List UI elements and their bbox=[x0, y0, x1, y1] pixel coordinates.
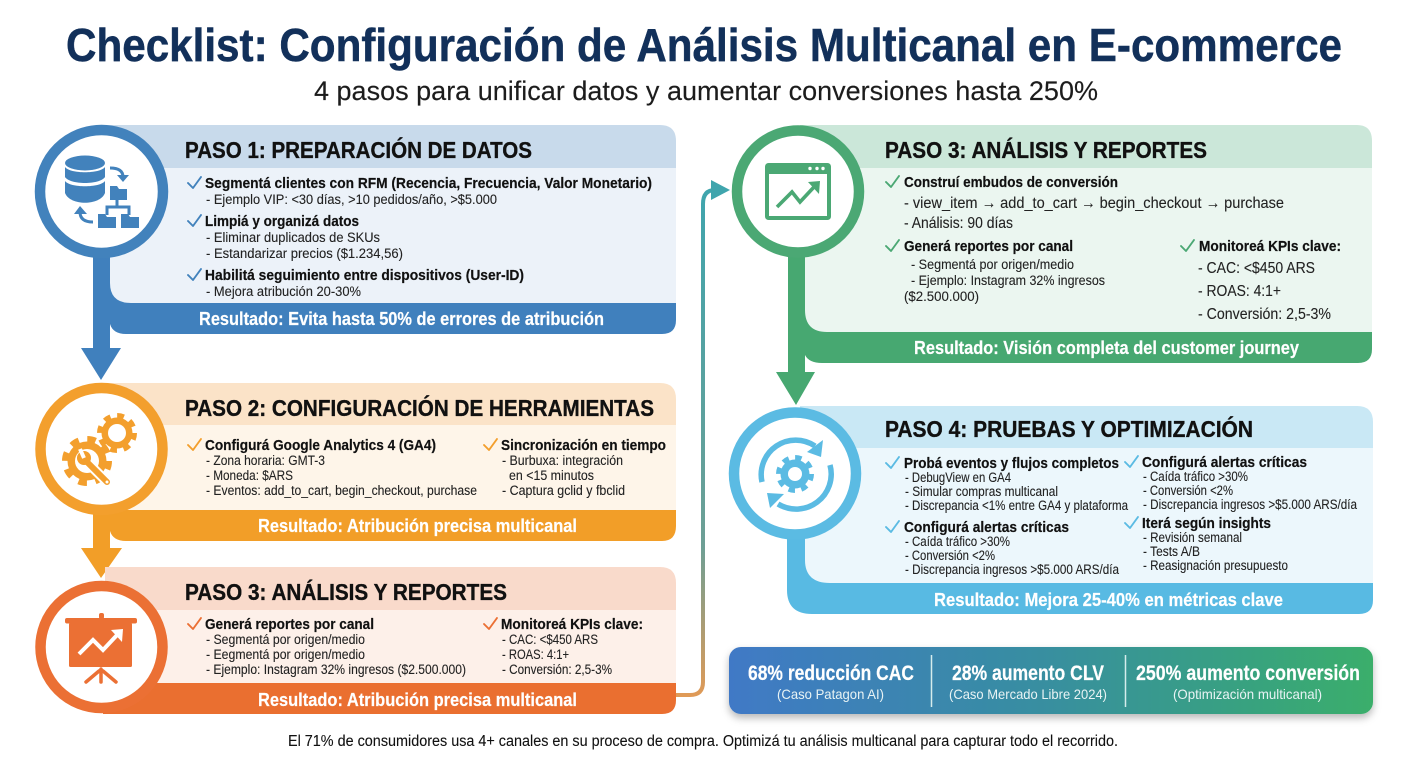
checklist: paso 1: - Estandarizar precios ($1.234,56) bbox=[206, 246, 403, 261]
panel: paso 4 bbox=[734, 406, 1373, 614]
checklist: paso 3 izquierda left: Generá reportes por canal bbox=[205, 616, 374, 633]
icon: presentation board bbox=[40, 586, 162, 708]
checklist: KPIs: - Conversión: 2,5-3% bbox=[1198, 306, 1331, 323]
stat: 68%: 68% reducción CAC bbox=[748, 662, 914, 685]
checklist: embudos: - Análisis: 90 días bbox=[904, 215, 1013, 232]
checklist: KPIs: - CAC: <$450 ARS bbox=[1198, 260, 1315, 277]
subtitle: 4 pasos para unificar datos y aumentar conversiones hasta 250% bbox=[314, 76, 1098, 106]
checklist: reportes por canal bbox=[886, 238, 1105, 304]
checklist: iterá: - Reasignación presupuesto bbox=[1143, 558, 1288, 573]
result: paso 3 derecha: Resultado: Visión completa del customer journey bbox=[914, 338, 1299, 358]
checklist: alertas derecha: - Conversión <2% bbox=[1143, 483, 1233, 498]
icon: browser window with chart bbox=[737, 130, 859, 252]
checklist: probá eventos: - Simular compras multicanal bbox=[905, 484, 1058, 499]
checklist: reportes por canal: Generá reportes por canal bbox=[904, 238, 1073, 255]
checklist: paso 2 right: en <15 minutos bbox=[509, 468, 594, 483]
checklist: paso 1: - Ejemplo VIP: <30 días, >10 pedidos/año, >$5.000 bbox=[206, 192, 497, 207]
checklist: reportes por canal: ($2.500.000) bbox=[904, 289, 979, 304]
checklist: paso 2 left bbox=[188, 437, 477, 498]
checklist: probá eventos: - DebugView en GA4 bbox=[905, 470, 1011, 485]
checklist: paso 3 izquierda right: Monitoreá KPIs clave: bbox=[501, 616, 643, 633]
stat: 28%: 28% aumento CLV bbox=[952, 662, 1104, 685]
panel: paso 1 bbox=[40, 125, 676, 380]
result bar: paso 3 izquierda bbox=[103, 683, 676, 714]
connector and result bar: paso 1 bbox=[81, 250, 676, 380]
checklist: iterá: - Revisión semanal bbox=[1143, 530, 1242, 545]
checklist: KPIs: - ROAS: 4:1+ bbox=[1198, 283, 1281, 300]
panel: resultados clave bbox=[729, 647, 1373, 714]
checklist: paso 3 izquierda left: - Ejemplo: Instagram 32% ingresos ($2.500.000) bbox=[206, 662, 466, 677]
checklist: iterá bbox=[1125, 515, 1288, 573]
checklist: alertas izquierda: - Caída tráfico >30% bbox=[905, 534, 1010, 549]
checklist: alertas izquierda: - Discrepancia ingresos >$5.000 ARS/día bbox=[905, 562, 1119, 577]
checklist: alertas izquierda bbox=[886, 519, 1119, 577]
checklist: embudos: Construí embudos de conversión bbox=[904, 174, 1118, 191]
stat: 28% bbox=[949, 662, 1107, 702]
result: paso 1: Resultado: Evita hasta 50% de errores de atribución bbox=[199, 309, 604, 329]
checklist: probá eventos bbox=[886, 455, 1128, 513]
checklist: alertas izquierda: - Conversión <2% bbox=[905, 548, 995, 563]
icon: refresh arrows with gear bbox=[734, 412, 856, 534]
stat: 28%: (Caso Mercado Libre 2024) bbox=[949, 686, 1107, 702]
panel: paso 3 derecha bbox=[737, 125, 1372, 405]
result: paso 4: Resultado: Mejora 25-40% en métricas clave bbox=[934, 590, 1283, 610]
connector and result bar: paso 4 bbox=[787, 530, 1373, 614]
stat: 250%: 250% aumento conversión bbox=[1136, 662, 1360, 685]
icon: database and folders bbox=[40, 130, 163, 253]
checklist: paso 3 izquierda right: - ROAS: 4:1+ bbox=[502, 647, 569, 662]
heading: paso 3 izquierda: PASO 3: ANÁLISIS Y REPORTES bbox=[185, 578, 507, 605]
checklist: alertas derecha: Configurá alertas críticas bbox=[1142, 454, 1307, 471]
checklist: paso 1: - Mejora atribución 20-30% bbox=[206, 284, 361, 299]
checklist: paso 1 bbox=[188, 175, 652, 299]
checklist: paso 3 izquierda right bbox=[484, 616, 643, 677]
checklist: paso 2 right bbox=[484, 437, 666, 498]
checklist: paso 2 left: - Zona horaria: GMT-3 bbox=[206, 453, 325, 468]
checklist: alertas derecha bbox=[1125, 454, 1357, 512]
checklist: paso 2 left: - Eventos: add_to_cart, begin_checkout, purchase bbox=[206, 483, 477, 498]
heading: paso 4: PASO 4: PRUEBAS Y OPTIMIZACIÓN bbox=[885, 415, 1253, 442]
checklist: paso 2 right: Sincronización en tiempo bbox=[501, 437, 666, 454]
checklist: embudos: - view_item → add_to_cart → begin_checkout → purchase bbox=[904, 195, 1284, 212]
checklist: probá eventos: Probá eventos y flujos completos bbox=[904, 455, 1119, 472]
stat: 250%: (Optimización multicanal) bbox=[1173, 686, 1322, 702]
checklist: alertas derecha: - Caída tráfico >30% bbox=[1143, 469, 1248, 484]
checklist: KPIs bbox=[1181, 238, 1341, 323]
checklist: paso 1: Habilitá seguimiento entre dispositivos (User-ID) bbox=[205, 267, 524, 284]
result: paso 3 izquierda: Resultado: Atribución precisa multicanal bbox=[258, 690, 577, 710]
checklist: KPIs: Monitoreá KPIs clave: bbox=[1199, 238, 1341, 255]
checklist: paso 3 izquierda left: - Segmentá por origen/medio bbox=[206, 632, 365, 647]
checklist: alertas derecha: - Discrepancia ingresos >$5.000 ARS/día bbox=[1143, 497, 1357, 512]
checklist: paso 3 izquierda right: - Conversión: 2,5-3% bbox=[502, 662, 612, 677]
checklist: iterá: - Tests A/B bbox=[1143, 544, 1200, 559]
stat: 68% bbox=[748, 662, 914, 702]
arrow: connector from left column to right column bbox=[676, 180, 730, 695]
checklist: paso 2 left: Configurá Google Analytics 4 (GA4) bbox=[205, 437, 436, 454]
icon: gears and wrench bbox=[40, 388, 162, 510]
checklist: paso 2 left: - Moneda: $ARS bbox=[206, 468, 293, 483]
checklist: paso 1: Segmentá clientes con RFM (Recencia, Frecuencia, Valor Monetario) bbox=[205, 175, 652, 192]
checklist: alertas izquierda: Configurá alertas críticas bbox=[904, 519, 1069, 536]
heading: paso 2: PASO 2: CONFIGURACIÓN DE HERRAMIENTAS bbox=[185, 394, 654, 421]
heading: paso 3 derecha: PASO 3: ANÁLISIS Y REPORTES bbox=[885, 136, 1207, 163]
checklist: probá eventos: - Discrepancia <1% entre GA4 y plataforma bbox=[905, 498, 1128, 513]
stat: 68%: (Caso Patagon AI) bbox=[777, 686, 884, 702]
panel: paso 3 izquierda bbox=[40, 567, 676, 714]
footer note: El 71% de consumidores usa 4+ canales en su proceso de compra. Optimizá tu análisis multicanal para capturar todo el recorrido. bbox=[288, 733, 1118, 750]
checklist: paso 1: Limpiá y organizá datos bbox=[205, 213, 359, 230]
result: paso 2: Resultado: Atribución precisa multicanal bbox=[258, 516, 577, 536]
checklist: paso 3 izquierda right: - CAC: <$450 ARS bbox=[502, 632, 598, 647]
connector and result bar: paso 2 bbox=[81, 505, 676, 578]
stat: 250% bbox=[1136, 662, 1360, 702]
checklist: embudos bbox=[886, 174, 1284, 232]
panel: paso 2 bbox=[40, 383, 676, 578]
checklist: paso 1: - Eliminar duplicados de SKUs bbox=[206, 230, 380, 245]
checklist: paso 3 izquierda left: - Eegmentá por origen/medio bbox=[206, 647, 365, 662]
checklist: paso 3 izquierda left bbox=[188, 616, 466, 677]
heading: paso 1: PASO 1: PREPARACIÓN DE DATOS bbox=[185, 136, 532, 163]
connector and result bar: paso 3 derecha bbox=[776, 250, 1372, 405]
checklist: reportes por canal: - Ejemplo: Instagram 32% ingresos bbox=[911, 273, 1105, 288]
checklist: paso 2 right: - Burbuxa: integración bbox=[502, 453, 623, 468]
checklist: iterá: Iterá según insights bbox=[1142, 515, 1271, 532]
checklist: reportes por canal: - Segmentá por origen/medio bbox=[911, 257, 1074, 272]
checklist: paso 2 right: - Captura gclid y fbclid bbox=[502, 483, 625, 498]
